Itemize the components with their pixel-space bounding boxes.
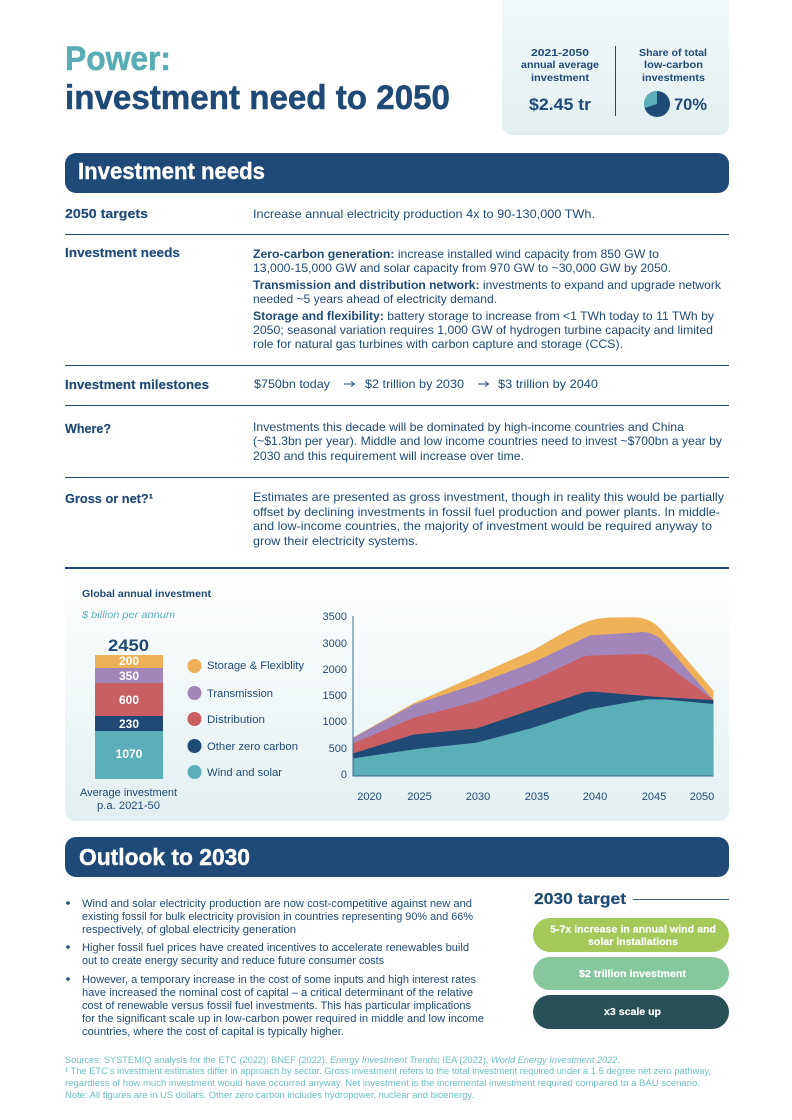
title: investment need to 2050 <box>65 79 450 117</box>
arrow <box>344 382 354 386</box>
row: where: (~$1.3bn per year). Middle and low income countries need to invest ~$700bn a year by <box>253 435 722 448</box>
row: investment milestones: $750bn today <box>254 378 330 391</box>
row: where <box>65 421 722 463</box>
stacked bar: average investment: 600 <box>119 693 139 707</box>
panel: 2030 target <box>533 891 729 1029</box>
row: investment needs: 2050; seasonal variation requires 1,000 GW of hydrogen turbine capacity and limited <box>253 324 713 337</box>
row: investment needs: Zero-carbon generation: increase installed wind capacity from 850 GW to <box>253 248 659 261</box>
row: investment milestones <box>65 378 598 392</box>
chart unit: $ billion per annum <box>81 609 175 621</box>
y axis labels: 3500 <box>323 611 347 623</box>
row: 2050 targets: Increase annual electricity production 4x to 90-130,000 TWh. <box>253 208 595 221</box>
row: gross or net <box>65 491 724 548</box>
area chart <box>323 611 714 803</box>
footnotes: regardless of how much investment would have occurred anyway. Net investment is the incremental investment required compared to a BAU scenario. <box>65 1078 700 1088</box>
row: investment needs: role for natural gas turbines with carbon capture and storage (CCS). <box>253 338 623 351</box>
legend: Storage & Flexiblity <box>207 660 305 672</box>
stacked bar: average investment: p.a. 2021-50 <box>97 800 160 812</box>
x axis labels: 2045 <box>642 791 666 803</box>
row: gross or net: Gross or net?¹ <box>65 492 153 506</box>
stacked bar: average investment: 350 <box>119 669 139 683</box>
panel: key statistics <box>502 0 729 135</box>
row: 2050 targets: 2050 targets <box>65 207 148 221</box>
heading: outlook to 2030 <box>65 837 729 877</box>
row: investment needs: Transmission and distribution network: investments to expand and upgrade network <box>253 279 721 292</box>
stacked bar: average investment: 1070 <box>116 747 143 761</box>
bullet list: outlook: Wind and solar electricity production are now cost-competitive against new and <box>82 898 472 910</box>
annual average investment statistic <box>521 48 599 114</box>
stacked bar: average investment <box>80 637 177 812</box>
y axis labels: 1000 <box>323 716 347 728</box>
x axis labels: 2050 <box>690 791 714 803</box>
row: investment milestones: $2 trillion by 2030 <box>365 378 464 391</box>
row: where: 2030 and this requirement will increase over time. <box>253 450 524 463</box>
heading: investment needs: Investment needs <box>78 158 265 184</box>
row: gross or net: grow their electricity systems. <box>253 535 418 548</box>
y axis labels: 0 <box>341 769 347 781</box>
share of low-carbon investments statistic: low-carbon <box>644 60 703 71</box>
legend <box>188 659 305 779</box>
share of low-carbon investments statistic: 70% <box>674 96 707 114</box>
arrow <box>478 382 488 386</box>
row: investment needs: needed ~5 years ahead of electricity demand. <box>253 293 497 306</box>
legend: Wind and solar <box>207 767 282 779</box>
stacked bar: average investment: 200 <box>119 654 139 668</box>
footnotes: Sources: SYSTEMIQ analysis for the ETC (2022); BNEF (2022), Energy Investment Trends; IEA (2022), World Energy Investment 2022. <box>65 1055 620 1065</box>
x axis labels: 2035 <box>525 791 549 803</box>
row: investment needs: Storage and flexibility: battery storage to increase from <1 TWh today to 11 TWh by <box>253 310 714 323</box>
share of low-carbon investments statistic: Share of total <box>639 48 707 59</box>
row: 2050 targets <box>65 207 595 221</box>
bullet list: outlook: Higher fossil fuel prices have created incentives to accelerate renewables build <box>82 942 469 954</box>
bullet list: outlook: cost of renewable versus fossil fuel investments. This has particular implications <box>82 1000 472 1012</box>
stacked bar: average investment: 2450 <box>108 637 149 655</box>
row: gross or net: Estimates are presented as gross investment, though in reality this would be partially <box>253 491 724 504</box>
share of low-carbon investments statistic <box>639 48 707 117</box>
row: investment needs <box>65 246 721 351</box>
title: Power: <box>65 40 171 78</box>
x axis labels: 2040 <box>583 791 607 803</box>
icon: pie chart 70% <box>644 91 670 117</box>
row: investment milestones: $3 trillion by 2040 <box>498 378 598 391</box>
legend: Transmission <box>207 688 273 700</box>
pill: installations: 5-7x increase in annual wind and <box>550 924 716 936</box>
bullet list: outlook: have increased the nominal cost of capital – a critical determinant of the relative <box>82 987 473 999</box>
y axis labels: 500 <box>329 743 347 755</box>
bullet list: outlook: countries, where the cost of capital is typically higher. <box>82 1026 344 1038</box>
footnotes: Note: All figures are in US dollars. Other zero carbon includes hydropower, nuclear and bioenergy. <box>65 1090 474 1100</box>
stacked bar: average investment: 230 <box>119 717 139 731</box>
annual average investment statistic: annual average <box>521 60 599 71</box>
y axis labels <box>323 611 347 781</box>
x axis labels: 2030 <box>466 791 490 803</box>
pill: scale up: x3 scale up <box>604 1007 661 1018</box>
share of low-carbon investments statistic: investments <box>642 73 705 84</box>
row: investment needs: 13,000-15,000 GW and solar capacity from 970 GW to ~30,000 GW by 2050. <box>253 262 671 275</box>
row: gross or net: and low-income countries, the majority of investment would be required anyway to <box>253 520 712 533</box>
stacked bar: average investment: Average investment <box>80 787 177 799</box>
annual average investment statistic: $2.45 tr <box>529 96 592 114</box>
y axis labels: 1500 <box>323 690 347 702</box>
target heading: 2030 target <box>534 891 627 908</box>
panel: global annual investment <box>65 575 729 1100</box>
row: investment needs: Investment needs <box>65 246 180 260</box>
legend: Distribution <box>207 714 265 726</box>
y axis labels: 2000 <box>323 664 347 676</box>
bullet list: outlook <box>66 898 484 1038</box>
x axis labels: 2020 <box>357 791 382 803</box>
y axis labels: 3000 <box>323 638 347 650</box>
row: where: Where? <box>65 422 111 436</box>
footnotes: ¹ The ETC’s investment estimates differ in approach by sector. Gross investment refers to the total investment required under a 1.5 degree net zero pathway, <box>65 1066 711 1076</box>
bullet list: outlook: respectively, of global electricity generation <box>82 924 296 936</box>
row: where: Investments this decade will be dominated by high-income countries and China <box>253 421 685 434</box>
row: gross or net: offset by declining investments in fossil fuel production and power plants. In middle- <box>253 506 720 519</box>
heading: investment needs <box>65 153 729 193</box>
annual average investment statistic: 2021-2050 <box>531 48 589 59</box>
footnotes <box>65 1055 711 1100</box>
x axis labels <box>357 791 714 803</box>
annual average investment statistic: investment <box>531 73 590 84</box>
x axis labels: 2025 <box>407 791 432 803</box>
bullet list: outlook: for the significant scale up in low-carbon power required in middle and low income <box>82 1013 484 1025</box>
pill: installations <box>533 918 729 952</box>
pill: scale up <box>533 995 729 1029</box>
title <box>65 40 450 117</box>
legend: Other zero carbon <box>207 741 298 753</box>
heading: outlook to 2030: Outlook to 2030 <box>79 844 250 870</box>
pill: investment <box>533 957 729 990</box>
bullet list: outlook: However, a temporary increase in the cost of some inputs and high interest rates <box>82 974 477 986</box>
chart title: Global annual investment <box>82 589 212 600</box>
row: investment milestones: Investment milestones <box>65 378 209 392</box>
pill: installations: solar installations <box>588 937 678 948</box>
bullet list: outlook: out to create energy security and reduce future consumer costs <box>82 955 385 967</box>
pill: investment: $2 trillion investment <box>579 969 687 980</box>
bullet list: outlook: existing fossil for bulk electricity provision in countries representing 90% and 66% <box>82 911 473 923</box>
